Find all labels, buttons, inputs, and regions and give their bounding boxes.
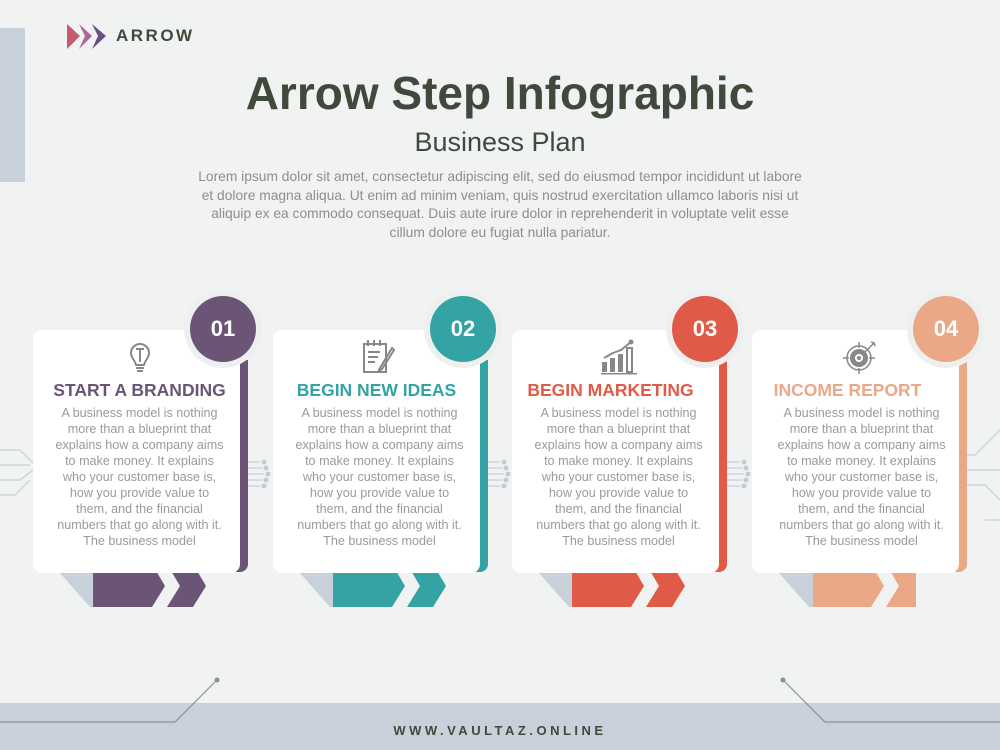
- intro text: cillum dolore eu fugiat nulla pariatur.: [390, 224, 610, 240]
- panel: step 1: START A BRANDING: [53, 380, 226, 400]
- panel: step 2: more than a blueprint that: [308, 422, 451, 436]
- icon: bar chart: [601, 340, 637, 374]
- icon: target: [843, 341, 876, 374]
- panel: step 4: A business model is nothing: [783, 406, 940, 420]
- panel: step 2: who your customer base is,: [303, 470, 456, 484]
- panel: step 1: [33, 296, 256, 607]
- panel: step 2: to make money. It explains: [305, 454, 454, 468]
- panel: step 3: A business model is nothing: [540, 406, 697, 420]
- panel: step 3: The business model: [562, 534, 675, 548]
- panel: step 3: more than a blueprint that: [547, 422, 690, 436]
- panel: step 3: who your customer base is,: [542, 470, 695, 484]
- panel: step 4: who your customer base is,: [785, 470, 938, 484]
- panel: step 2: A business model is nothing: [301, 406, 458, 420]
- panel: step 4: them, and the financial: [798, 502, 925, 516]
- panel: step 3: explains how a company aims: [534, 438, 702, 452]
- panel: step 1: who your customer base is,: [63, 470, 216, 484]
- logo: ARROW: [116, 26, 195, 45]
- title: Arrow Step Infographic: [246, 67, 754, 119]
- panel: step 2: explains how a company aims: [296, 438, 464, 452]
- panel: step 1: more than a blueprint that: [68, 422, 211, 436]
- panel: step 1: them, and the financial: [76, 502, 203, 516]
- panel: step 3: [512, 296, 738, 607]
- panel: step 2: how you provide value to: [310, 486, 449, 500]
- panel: step 4: more than a blueprint that: [790, 422, 933, 436]
- panel: step 4: INCOME REPORT: [774, 380, 921, 400]
- bottom band: [0, 703, 1000, 750]
- panel: step 1: A business model is nothing: [61, 406, 218, 420]
- panel: step 3: BEGIN MARKETING: [527, 380, 694, 400]
- panel: step 3: numbers that go along with it.: [536, 518, 701, 532]
- intro text: aliquip ex ea commodo consequat. Duis aute irure dolor in reprehenderit in voluptate velit esse: [211, 206, 789, 221]
- left decorative bar: [0, 28, 25, 182]
- icon: notepad: [363, 340, 396, 373]
- panel: step 1: to make money. It explains: [65, 454, 214, 468]
- panel: step 4: 04: [934, 316, 958, 341]
- icon: light bulb: [130, 343, 150, 372]
- panel: step 3: how you provide value to: [549, 486, 688, 500]
- footer url: WWW.VAULTAZ.ONLINE: [393, 723, 607, 738]
- intro text: [198, 169, 802, 240]
- panel: step 1: The business model: [83, 534, 196, 548]
- panel: step 4: to make money. It explains: [787, 454, 936, 468]
- panel: step 4: how you provide value to: [792, 486, 931, 500]
- panel: step 2: them, and the financial: [316, 502, 443, 516]
- intro text: Lorem ipsum dolor sit amet, consectetur adipiscing elit, sed do eiusmod tempor incididunt ut labore: [198, 169, 802, 184]
- subtitle: Business Plan: [414, 127, 586, 157]
- panel: step 4: [752, 296, 979, 607]
- panel: step 4: numbers that go along with it.: [779, 518, 944, 532]
- panel: step 2: 02: [451, 316, 475, 341]
- panel: step 2: [273, 296, 496, 607]
- panel: step 2: numbers that go along with it.: [297, 518, 462, 532]
- panel: step 1: explains how a company aims: [56, 438, 224, 452]
- panel: step 2: BEGIN NEW IDEAS: [297, 380, 456, 400]
- panel: step 4: The business model: [805, 534, 918, 548]
- panel: step 1: 01: [211, 316, 235, 341]
- intro text: et dolore magna aliqua. Ut enim ad minim veniam, quis nostrud exercitation ullamco laboris nisi ut: [202, 188, 798, 202]
- panel: step 2: The business model: [323, 534, 436, 548]
- panel: step 3: 03: [693, 316, 717, 341]
- panel: step 1: numbers that go along with it.: [57, 518, 222, 532]
- panel: step 3: them, and the financial: [555, 502, 682, 516]
- logo: [67, 24, 195, 49]
- icon: triple chevrons: [67, 24, 106, 49]
- panel: step 3: to make money. It explains: [544, 454, 693, 468]
- panel: step 4: explains how a company aims: [778, 438, 946, 452]
- panel: step 1: how you provide value to: [70, 486, 209, 500]
